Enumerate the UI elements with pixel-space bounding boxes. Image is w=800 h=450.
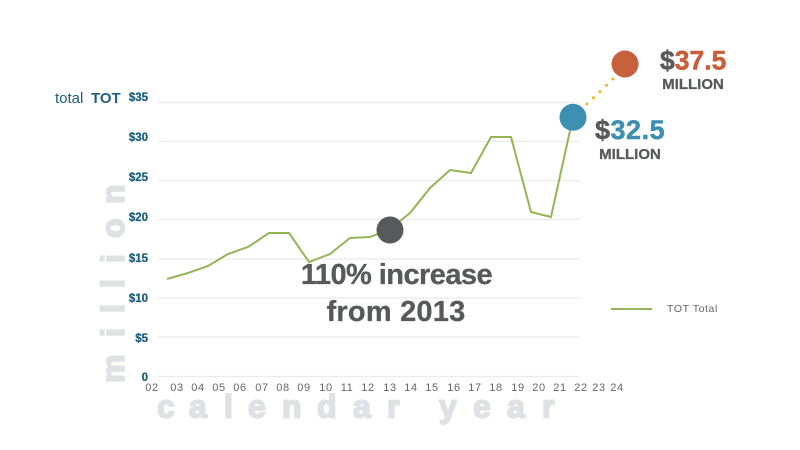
x axis labels: 16: [447, 382, 461, 394]
marker: 37.5 million: [612, 50, 638, 78]
y axis grid lines: [158, 102, 580, 376]
x axis labels: 19: [511, 382, 525, 394]
heading: total TOT: total: [55, 90, 83, 107]
x axis labels: 18: [489, 382, 503, 394]
callout: from 2013: from 2013: [327, 296, 465, 328]
marker: 2013: [376, 216, 404, 244]
x axis labels: 10: [319, 382, 333, 394]
y axis labels: $15: [129, 253, 149, 265]
value: 37.5 million: MILLION: [662, 76, 724, 93]
x axis labels: 24: [610, 382, 624, 394]
x axis labels: 09: [297, 382, 311, 394]
x axis labels: 03: [170, 382, 184, 394]
x axis labels: 14: [404, 382, 418, 394]
value: 32.5 million: MILLION: [599, 146, 661, 163]
x axis labels: 05: [212, 382, 226, 394]
value: 32.5 million: [595, 115, 665, 163]
y axis labels: $10: [129, 293, 148, 305]
x axis labels: 15: [425, 382, 439, 394]
y axis labels: 0: [142, 372, 148, 384]
axis title: year: year: [439, 388, 554, 424]
axis title: calendar: calendar: [157, 388, 399, 424]
x axis labels: 04: [191, 382, 205, 394]
x axis labels: 08: [276, 382, 290, 394]
marker: 32.5 million: [560, 104, 586, 131]
callout: 110% increase: 110% increase: [301, 259, 493, 291]
value: 37.5 million: $37.5: [660, 46, 726, 76]
x axis labels: 12: [361, 382, 375, 394]
y axis labels: $25: [129, 172, 149, 184]
line chart: TOT total: [167, 117, 573, 279]
legend: TOT Total: [611, 303, 718, 315]
value: 32.5 million: $32.5: [595, 115, 665, 145]
x axis labels: 23: [592, 382, 606, 394]
x axis labels: 17: [468, 382, 482, 394]
x axis labels: 13: [383, 382, 397, 394]
y axis labels: $5: [135, 333, 149, 345]
x axis labels: 06: [233, 382, 247, 394]
x axis labels: 22: [574, 382, 588, 394]
legend: TOT Total: TOT Total: [667, 303, 718, 315]
x axis labels: 07: [255, 382, 269, 394]
projection dotted line: [587, 78, 614, 104]
x axis labels: 11: [341, 382, 353, 394]
y axis labels: $20: [129, 212, 148, 224]
x axis labels: 02: [145, 382, 159, 394]
y axis labels: [129, 92, 149, 384]
x axis labels: 21: [553, 382, 567, 394]
heading: total TOT: TOT: [91, 90, 121, 107]
x axis labels: 20: [532, 382, 546, 394]
x axis labels: [145, 382, 624, 394]
value: 37.5 million: [660, 46, 726, 93]
y axis labels: $35: [129, 92, 149, 104]
y axis labels: $30: [129, 132, 148, 144]
axis title: million: million: [95, 184, 131, 383]
